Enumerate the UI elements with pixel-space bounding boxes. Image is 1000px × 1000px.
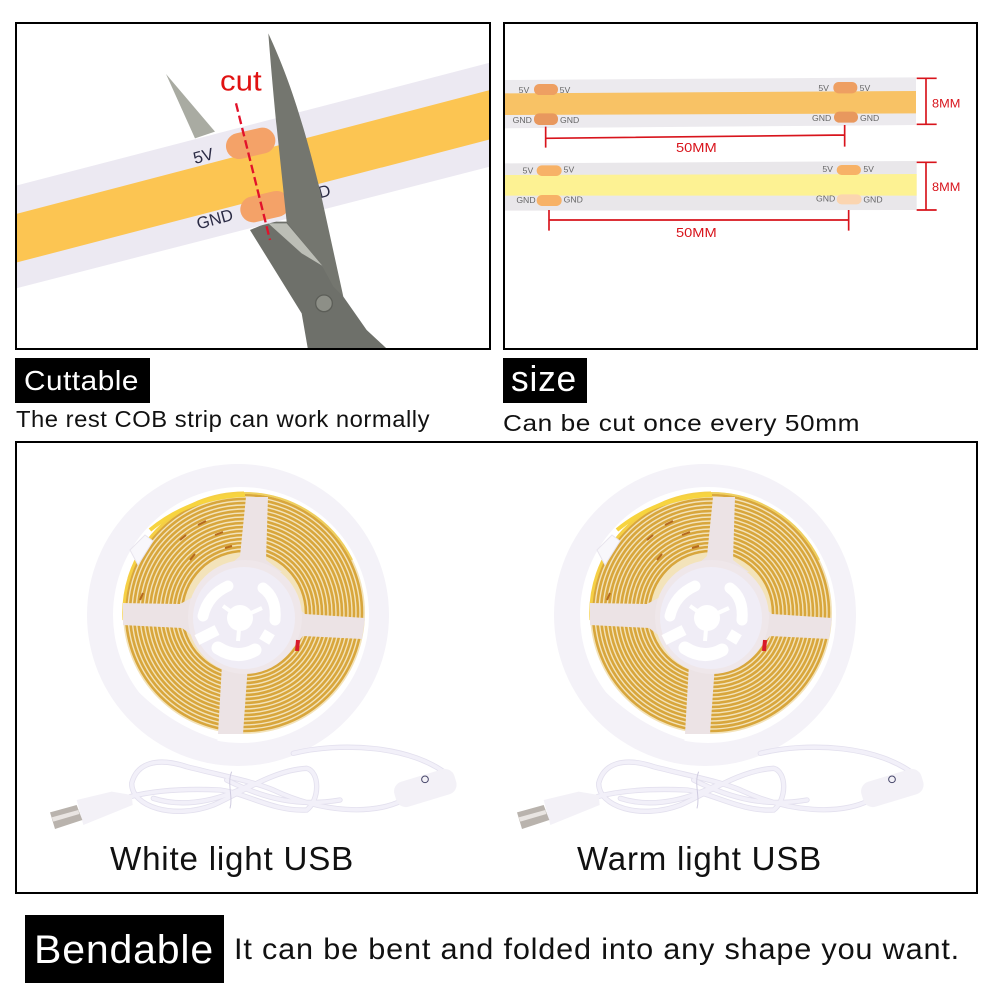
dimension: white strip (549, 162, 960, 240)
white strip: GND (564, 195, 583, 205)
warm strip: 5V (519, 85, 529, 95)
reel hub (188, 560, 302, 674)
white strip: GND (863, 194, 883, 204)
product: warm light reel (517, 464, 926, 829)
LED coil (123, 492, 365, 734)
reel tab (130, 535, 153, 565)
heading: Bendable: Bendable (34, 928, 214, 972)
warm strip: GND (513, 115, 532, 125)
LED strip: GND (194, 205, 235, 233)
white strip (505, 161, 917, 211)
text: size description: Can be cut once every 50mm (503, 410, 860, 436)
white strip: GND (816, 194, 835, 204)
cut line (236, 103, 270, 240)
heading: Cuttable: Cuttable (24, 365, 139, 396)
product: white light reel (50, 464, 459, 829)
panel border: reels (16, 442, 977, 893)
dimension: white strip: 50MM (676, 225, 717, 240)
panel: size diagram (505, 77, 960, 240)
USB cable and switch (50, 747, 459, 829)
white strip: GND (516, 195, 536, 205)
LED strip: 5V (191, 144, 217, 168)
icon: scissors front blade (268, 33, 343, 312)
red wire (297, 640, 298, 651)
reel strip end (118, 673, 217, 742)
warm strip: GND (560, 115, 579, 125)
white strip: 5V (822, 164, 833, 174)
dimension: warm strip (546, 78, 960, 155)
white strip: 5V (523, 165, 533, 175)
dimension: warm strip: 50MM (676, 140, 717, 155)
warm strip: 5V (818, 83, 829, 93)
warm strip: GND (812, 113, 831, 123)
white strip: 5V (564, 165, 574, 175)
label: white light: White light USB (110, 840, 354, 877)
warm strip (505, 77, 916, 128)
LED strip (16, 63, 490, 288)
heading: size: size (511, 358, 577, 399)
reel outer disc (87, 464, 389, 766)
dimension: warm strip: 8MM (932, 97, 960, 110)
panel border: cut photo (16, 23, 490, 349)
warm strip: 5V (560, 85, 570, 95)
panel: cut photo (16, 33, 490, 352)
dimension: white strip: 8MM (932, 181, 960, 194)
reel spokes (123, 497, 365, 734)
icon: scissors rear blade (166, 74, 390, 352)
label: warm light: Warm light USB (577, 840, 822, 877)
warm strip: 5V (860, 83, 870, 93)
text: bendable description: It can be bent and folded into any shape you want. (234, 933, 960, 966)
white strip: 5V (863, 164, 874, 174)
cut label: cut (220, 65, 262, 97)
heading: Cuttable (15, 358, 150, 403)
heading: Bendable (25, 915, 224, 983)
LED strip: D (316, 181, 333, 202)
text: cuttable description: The rest COB strip can work normally (16, 406, 430, 432)
panel border: size diagram (504, 23, 977, 349)
reel gap (113, 487, 369, 743)
warm strip: GND (860, 113, 879, 123)
